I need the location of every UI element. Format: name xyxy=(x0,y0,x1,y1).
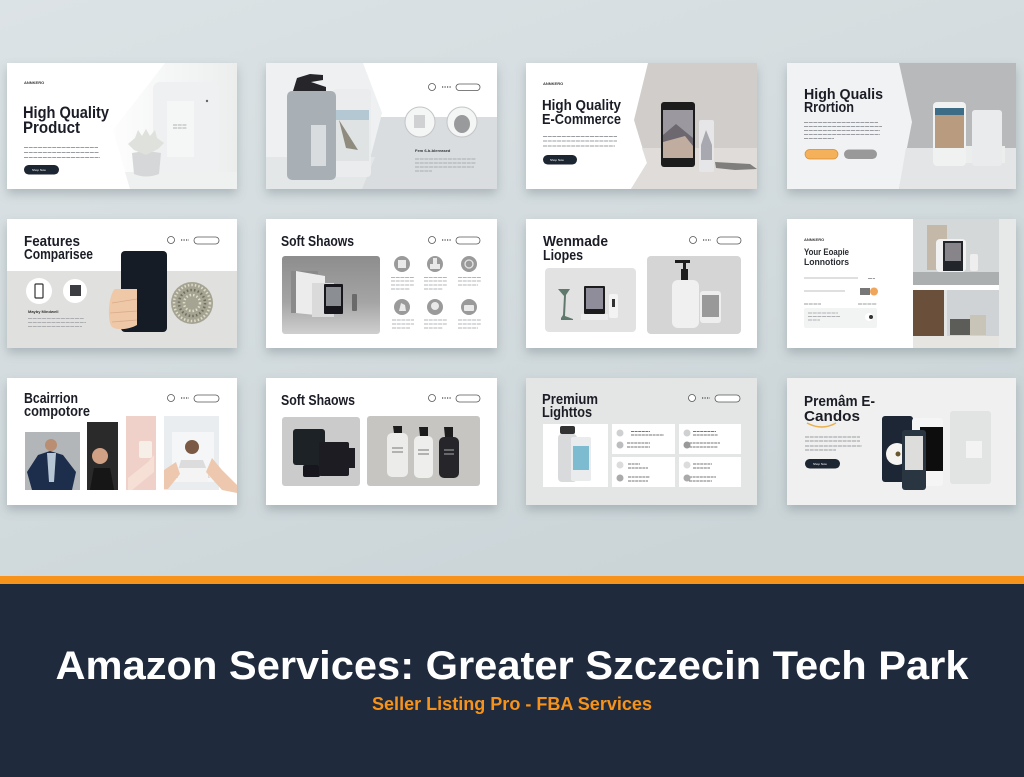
panel: Soft Shaows bottles xyxy=(266,378,497,505)
panel: Premam E-Candos: Premâm E- xyxy=(804,393,875,410)
panel: High Qualis Rrortion xyxy=(787,63,1016,189)
orange stripe xyxy=(0,576,1024,584)
panel: Wenmade Liopes: Wenmade xyxy=(543,233,608,250)
panel: Premium Lighttos: Premium xyxy=(542,391,598,408)
panel: High Qualis Rrortion: High Qualis xyxy=(804,86,883,103)
panel: High Quality Product: ANNKERO xyxy=(24,80,44,85)
panel: High Quality E-Commerce: E-Commerce xyxy=(542,111,621,128)
panel: High Quality E-Commerce xyxy=(526,63,757,189)
panel: High Quality Product: High Quality xyxy=(23,104,110,122)
panel: Features Comparisee: Features xyxy=(24,233,80,250)
panel: Your Eoapie Lonnotiors: Your Eoapie xyxy=(804,247,849,257)
panel: bottle and phone: Fem 6-b-blereased xyxy=(415,148,451,153)
panel: Wenmade Liopes: Liopes xyxy=(543,247,583,264)
panel: Your Eoapie Lonnotiors: ANNKERO xyxy=(804,237,824,242)
panel: High Quality Product: Shop Now xyxy=(32,168,47,172)
panel: Premam E-Candos: Shop Now xyxy=(813,462,828,466)
panel: Features Comparisee: Comparisee xyxy=(24,246,93,263)
panel: High Quality E-Commerce: Shop Now xyxy=(550,158,565,162)
panel: High Quality E-Commerce: ANNKERO xyxy=(543,81,563,86)
panel: Soft Shaows icons: Soft Shaows xyxy=(281,233,354,250)
panel: Features Comparisee: Mayby Mindwell xyxy=(28,309,58,314)
panel: Premium Lighttos xyxy=(526,378,757,505)
title: Amazon Services: Greater Szczecin Tech Park xyxy=(56,644,969,688)
panel: Premam E-Candos xyxy=(787,378,1016,505)
background xyxy=(0,0,1024,576)
panel: High Quality Product xyxy=(7,63,237,189)
icon row xyxy=(394,256,477,315)
panel: Premam E-Candos: Candos xyxy=(804,408,860,425)
panel: Bcairrion compotore xyxy=(7,378,237,505)
subtitle: Seller Listing Pro - FBA Services xyxy=(372,694,652,714)
slide grid xyxy=(7,63,1016,505)
panel: High Qualis Rrortion: Rrortion xyxy=(804,99,854,116)
panel: Soft Shaows bottles: Soft Shaows xyxy=(281,392,355,409)
footer band xyxy=(0,584,1024,777)
panel: Features Comparisee xyxy=(7,219,237,348)
panel: Wenmade Liopes xyxy=(526,219,757,348)
panel: Your Eoapie Lonnotiors: Lonnotiors xyxy=(804,257,849,267)
panel: Your Eoapie Lonnotiors xyxy=(787,219,1016,348)
panel: Bcairrion compotore: Bcairrion xyxy=(24,390,78,407)
panel: High Quality Product: Product xyxy=(23,119,80,137)
panel: Soft Shaows icons xyxy=(266,219,497,348)
panel: bottle and phone xyxy=(266,63,497,189)
amazon smile xyxy=(807,423,836,427)
panel: Premium Lighttos: Lighttos xyxy=(542,404,592,421)
panel: High Quality E-Commerce: High Quality xyxy=(542,97,622,114)
panel: Bcairrion compotore: compotore xyxy=(24,403,90,420)
